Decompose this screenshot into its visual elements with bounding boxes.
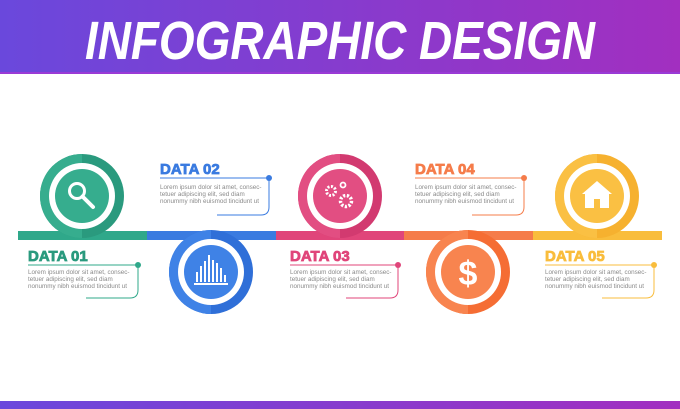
- text block 2: nonummy nibh euismod tincidunt ut: [160, 198, 259, 205]
- text block 4: DATA 04: [415, 161, 475, 178]
- icon: house: [582, 181, 612, 208]
- text block 1: tetuer adipiscing elit, sed diam: [28, 276, 113, 283]
- footer bar: [0, 401, 680, 409]
- text block 3: DATA 03: [290, 248, 350, 265]
- step 4 circle: dollar icon: [426, 230, 510, 314]
- text block 1: nonummy nibh euismod tincidunt ut: [28, 283, 127, 290]
- text block 3: [290, 248, 401, 298]
- icon: bar chart: [194, 255, 228, 285]
- icon: gears: [326, 182, 352, 206]
- text block 5: [545, 248, 657, 298]
- text block 1: Lorem ipsum dolor sit amet, consec-: [28, 269, 130, 276]
- text block 5: DATA 05: [545, 248, 605, 265]
- title: INFOGRAPHIC DESIGN: [85, 11, 597, 71]
- text block 1: DATA 01: [28, 248, 88, 265]
- step 5 circle: house icon: [555, 154, 639, 238]
- step 1 circle: search icon: [40, 154, 124, 238]
- text block 5: tetuer adipiscing elit, sed diam: [545, 276, 630, 283]
- text block 5: nonummy nibh euismod tincidunt ut: [545, 283, 644, 290]
- step 3 circle: gears icon: [298, 154, 382, 238]
- text block 2: Lorem ipsum dolor sit amet, consec-: [160, 184, 262, 191]
- text block 4: Lorem ipsum dolor sit amet, consec-: [415, 184, 516, 191]
- header banner: [0, 0, 680, 74]
- text block 4: [415, 161, 527, 215]
- text block 2: DATA 02: [160, 161, 220, 178]
- text block 5: Lorem ipsum dolor sit amet, consec-: [545, 269, 646, 276]
- step 2 circle: chart icon: [169, 230, 253, 314]
- icon: magnifier: [70, 184, 93, 207]
- text block 3: nonummy nibh euismod tincidunt ut: [290, 283, 389, 290]
- text block 1: [28, 248, 141, 298]
- text block 3: tetuer adipiscing elit, sed diam: [290, 276, 375, 283]
- text block 4: nonummy nibh euismod tincidunt ut: [415, 198, 514, 205]
- icon: dollar: $: [459, 255, 478, 293]
- text block 2: tetuer adipiscing elit, sed diam: [160, 191, 245, 198]
- text block 4: tetuer adipiscing elit, sed diam: [415, 191, 500, 198]
- timeline bar: [18, 231, 662, 240]
- text block 2: [160, 161, 272, 215]
- text block 3: Lorem ipsum dolor sit amet, consec-: [290, 269, 392, 276]
